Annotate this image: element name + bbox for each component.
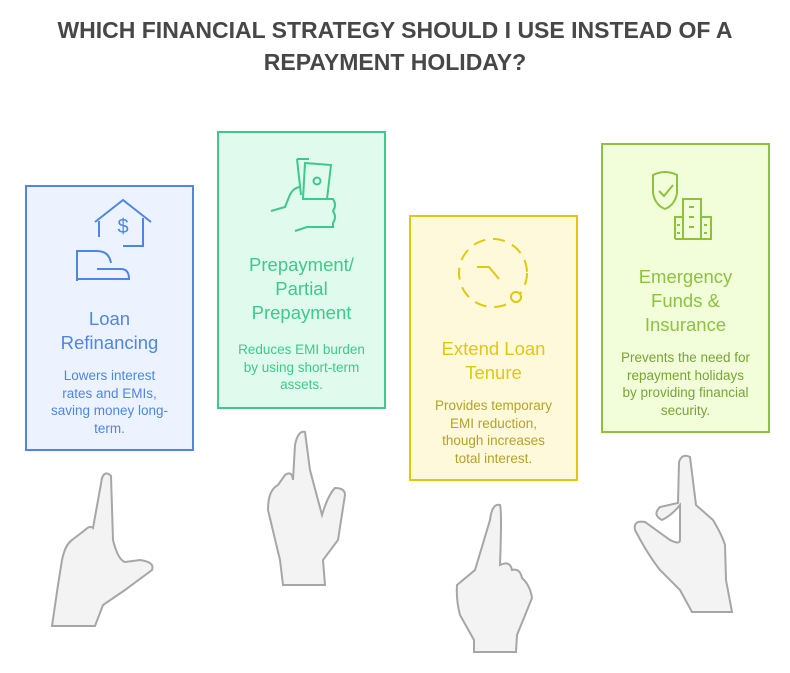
icon: shield and buildings <box>652 171 712 240</box>
text: though increases <box>442 433 545 448</box>
text <box>435 398 552 466</box>
text: Lowers interest <box>64 368 155 383</box>
text: by using short-term <box>244 360 359 374</box>
icon: cash in hand <box>270 158 336 232</box>
text: Provides temporary <box>435 398 552 413</box>
heading <box>442 338 545 383</box>
icon: house hand: $ <box>117 216 129 238</box>
text <box>51 368 168 436</box>
text: rates and EMIs, <box>62 386 157 400</box>
heading: Funds & <box>651 290 720 311</box>
heading <box>639 266 732 335</box>
text <box>621 350 750 418</box>
hand 2 <box>268 432 345 585</box>
text: security. <box>661 402 710 418</box>
icon: dashed clock <box>458 238 528 308</box>
heading: Insurance <box>645 314 726 335</box>
heading: Emergency <box>639 266 732 287</box>
heading: Prepayment <box>252 302 351 323</box>
text: repayment holidays <box>627 368 744 382</box>
text: Prevents the need for <box>621 350 750 365</box>
heading: Partial <box>275 278 328 299</box>
panel: loan refinancing <box>25 185 194 451</box>
icon: house hand <box>76 198 152 281</box>
text: saving money long- <box>51 403 168 418</box>
heading: Tenure <box>465 362 522 383</box>
heading <box>249 254 354 323</box>
heading: Extend Loan <box>442 338 545 359</box>
hand 4 <box>635 456 732 612</box>
hand 1 <box>52 473 152 626</box>
text: term. <box>94 420 125 436</box>
heading: Refinancing <box>61 332 158 353</box>
text: Reduces EMI burden <box>238 342 365 357</box>
title: REPAYMENT HOLIDAY? <box>264 49 526 75</box>
text: total interest. <box>455 450 532 466</box>
text: EMI reduction, <box>450 416 537 430</box>
title <box>57 17 733 75</box>
heading <box>61 308 158 353</box>
text: by providing financial <box>622 385 749 400</box>
panel: prepayment <box>217 131 386 409</box>
text <box>238 342 365 392</box>
text: assets. <box>280 377 323 392</box>
panel: extend loan tenure <box>409 215 578 481</box>
panel: emergency funds <box>601 143 770 433</box>
heading: Loan <box>89 308 130 329</box>
hand 3 <box>457 505 532 652</box>
title: WHICH FINANCIAL STRATEGY SHOULD I USE INSTEAD OF A <box>57 17 733 43</box>
heading: Prepayment/ <box>249 254 354 275</box>
